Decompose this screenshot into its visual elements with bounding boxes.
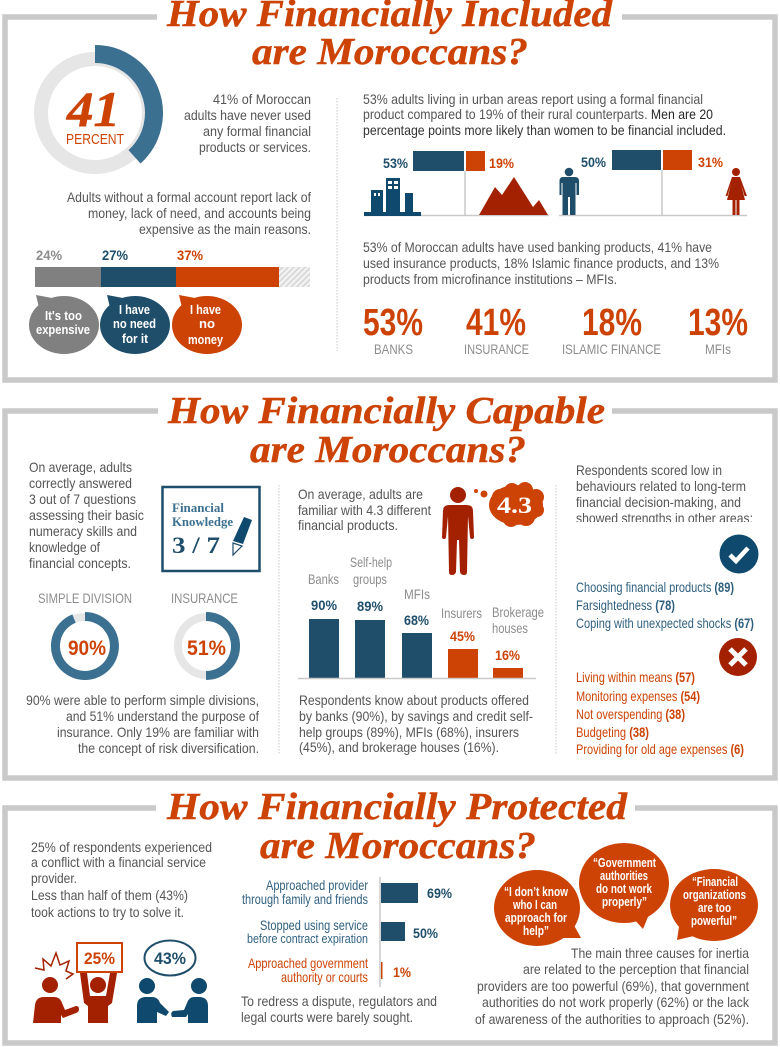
text: causes for inertia: providers are too powerful (69%), that government <box>477 978 749 994</box>
panel: financially protected <box>5 786 775 1043</box>
icon: people in conflict 25%: 25% <box>84 949 115 968</box>
icon: handshake 43%: 43% <box>154 949 186 968</box>
list: weaknesses: Living within means (57) <box>576 669 695 685</box>
text: correct answers: financial concepts. <box>29 555 131 571</box>
bar chart: actions taken: Approached government <box>248 955 368 971</box>
stat: banks <box>363 302 423 357</box>
stat: islamic finance <box>562 302 661 357</box>
speech bubble: who to approach: who I can <box>512 897 557 912</box>
stat: islamic finance: ISLAMIC FINANCE <box>562 341 661 357</box>
text: never used formal financial products: products or services. <box>199 139 311 155</box>
text: product usage: products from microfinance institutions – MFIs. <box>363 271 617 287</box>
ring: insurance 51% <box>171 590 238 676</box>
heading: capable: are Moroccans? <box>250 429 526 471</box>
speech bubble: government authorities: “Government <box>593 855 657 870</box>
ring: insurance 51%: INSURANCE <box>171 590 238 606</box>
text: redress <box>241 993 437 1025</box>
text: causes for inertia: of awareness of the authorities to approach (52%). <box>475 1011 749 1027</box>
bar chart: actions taken: 50% <box>413 925 438 941</box>
chart: men versus women: 31% <box>698 154 723 170</box>
text: correct answers: On average, adults <box>29 459 132 475</box>
bar chart: product awareness <box>298 554 544 678</box>
icon: person thinking 4.3: 4.3 <box>497 493 532 518</box>
text: urban rural men women: product compared to 19% of their rural counterparts. Men are 20 <box>363 106 713 122</box>
bar chart: actions taken: 69% <box>427 885 452 901</box>
text: conflict <box>31 839 212 920</box>
chart: urban versus rural <box>364 151 549 216</box>
heading: included <box>166 0 613 73</box>
text: correct answers: assessing their basic <box>29 507 144 523</box>
text: main reasons: Adults without a formal account report lack of <box>67 189 311 205</box>
heading: capable <box>167 390 605 471</box>
list: weaknesses: Budgeting (38) <box>576 724 649 740</box>
panel: financially included <box>5 0 775 380</box>
text: products known: Respondents know about products offered <box>299 692 529 708</box>
icon: person thinking 4.3 <box>442 482 544 575</box>
donut chart: 41 percent: PERCENT <box>66 131 124 148</box>
list: strengths: Choosing financial products (89) <box>576 579 734 595</box>
speech bubble: no need: no need <box>113 316 156 331</box>
heading: included: are Moroccans? <box>252 31 528 73</box>
panel: financially capable <box>5 390 775 778</box>
text: redress: To redress a dispute, regulators and <box>241 993 437 1009</box>
speech bubble: who to approach: help” <box>523 923 549 938</box>
stacked bar: reasons: 24% <box>36 247 63 263</box>
list: strengths: Coping with unexpected shocks (67) <box>576 615 754 631</box>
speech bubble: no money: I have <box>190 302 221 317</box>
text: causes for inertia: authorities do not work properly (62%) or the lack <box>482 994 750 1010</box>
heading: protected <box>166 786 628 867</box>
text: conflict: took actions to try to solve it. <box>31 904 184 920</box>
list: weaknesses: Not overspending (38) <box>576 706 685 722</box>
text: behaviours <box>576 465 752 522</box>
ring: simple division 90% <box>38 590 132 676</box>
icon: pencil <box>233 517 252 555</box>
speech bubble: no money <box>172 295 242 354</box>
ring: simple division 90%: 90% <box>68 637 106 660</box>
ring: insurance 51%: 51% <box>187 637 226 660</box>
heading: protected: are Moroccans? <box>260 825 536 867</box>
speech bubble: who to approach <box>494 870 581 946</box>
speech bubble: no need: I have <box>119 302 150 317</box>
speech bubble: no money: no <box>199 316 215 331</box>
speech bubble: too expensive: expensive <box>36 322 90 337</box>
stacked bar: reasons <box>35 247 310 287</box>
stat: MFIs: 13% <box>688 302 748 344</box>
text: behaviours: Respondents scored low in <box>576 462 722 478</box>
text: main reasons: money, lack of need, and accounts being <box>88 205 311 221</box>
speech bubble: government authorities: do not work <box>596 881 653 896</box>
text: products known: by banks (90%), by savings and credit self- <box>299 708 533 724</box>
bar chart: product awareness: Self-help <box>350 554 392 570</box>
bar chart: product awareness: Banks <box>308 571 339 587</box>
icon: man <box>560 168 579 215</box>
bar chart: product awareness: Brokerage <box>492 604 544 620</box>
bar chart: actions taken: 1% <box>393 964 411 980</box>
text: conflict: a conflict with a financial service <box>31 854 206 870</box>
text: correct answers: numeracy skills and <box>29 523 137 539</box>
bar chart: actions taken <box>242 877 452 987</box>
text: behaviours: financial decision-making, and <box>576 494 741 510</box>
text: divisions and insurance: the concept of risk diversification. <box>78 740 259 756</box>
speech bubble: financial organizations: organizations <box>683 887 746 902</box>
list: strengths: Farsightedness (78) <box>576 597 675 613</box>
icon: mountains <box>479 177 548 215</box>
text: causes for inertia: are related to the perception that financial <box>523 961 749 977</box>
bar chart: product awareness: MFIs <box>404 586 430 602</box>
bar chart: actions taken: Approached provider <box>266 877 368 893</box>
heading: protected: How Financially Protected <box>166 786 628 828</box>
chart: urban versus rural: 53% <box>383 155 408 171</box>
list: weaknesses <box>576 669 744 757</box>
card: financial knowledge 3 of 7: 3 / 7 <box>172 533 220 558</box>
icon: handshake 43% <box>137 940 208 1023</box>
speech bubble: no money: money <box>188 332 224 347</box>
speech bubble: financial organizations: are too <box>698 900 731 915</box>
icon: woman <box>726 168 747 215</box>
speech bubble: who to approach: “I don’t know <box>504 884 569 899</box>
text: divisions and insurance: insurance. Only 19% are familiar with <box>57 724 259 740</box>
bar chart: actions taken: Stopped using service <box>260 917 368 933</box>
text: correct answers: knowledge of <box>29 539 100 555</box>
heading: capable: How Financially Capable <box>167 390 605 432</box>
text: urban rural men women: 53% adults living in urban areas report using a formal financial <box>363 91 703 107</box>
text: urban rural men women <box>363 91 726 138</box>
stacked bar: reasons: 27% <box>102 247 129 263</box>
icon: people in conflict 25% <box>33 943 122 1023</box>
stat: insurance <box>464 302 529 357</box>
text: never used formal financial products <box>184 91 311 155</box>
speech bubble: too expensive: It's too <box>45 308 82 323</box>
stat: MFIs: MFIs <box>705 341 731 357</box>
text: correct answers: correctly answered <box>29 475 132 491</box>
text: familiar with products: financial products. <box>298 517 398 533</box>
list: strengths <box>576 579 754 631</box>
bar chart: actions taken: authority or courts <box>281 969 368 985</box>
speech bubble: who to approach: approach for <box>505 910 567 925</box>
text: causes for inertia <box>475 945 750 1027</box>
donut chart: 41 percent <box>41 54 154 167</box>
speech bubble: too expensive <box>29 295 99 354</box>
bar chart: product awareness: groups <box>353 571 387 587</box>
stacked bar: reasons: 37% <box>177 247 204 263</box>
text: product usage: 53% of Moroccan adults have used banking products, 41% have <box>363 239 712 255</box>
text: familiar with products <box>298 486 431 533</box>
stat: banks: BANKS <box>374 341 413 357</box>
text: product usage: used insurance products, 18% Islamic finance products, and 13% <box>363 255 719 271</box>
text: familiar with products: On average, adults are <box>298 486 423 502</box>
text: behaviours: behaviours related to long-term <box>576 478 746 494</box>
speech bubble: financial organizations: “Financial <box>692 874 738 889</box>
text: correct answers <box>29 459 144 571</box>
speech bubble: no need: for it <box>122 331 149 346</box>
text: conflict: Less than half of them (43%) <box>31 887 188 903</box>
bar chart: actions taken: before contract expiration <box>247 931 368 946</box>
chart: men versus women: 50% <box>581 154 606 170</box>
text: correct answers: 3 out of 7 questions <box>29 491 136 507</box>
stat: banks: 53% <box>363 302 423 344</box>
text: divisions and insurance: and 51% understand the purpose of <box>66 708 259 724</box>
text: never used formal financial products: any formal financial <box>203 123 311 139</box>
bar chart: product awareness: 89% <box>357 598 384 614</box>
text: conflict: provider. <box>31 870 77 886</box>
card: financial knowledge 3 of 7: Financial <box>172 500 224 515</box>
chart: urban versus rural: 19% <box>489 155 514 171</box>
bar chart: product awareness: 90% <box>311 597 338 613</box>
text: divisions and insurance <box>26 692 259 756</box>
donut chart: 41 percent: 41 <box>66 81 120 137</box>
text: familiar with products: familiar with 4.3 different <box>298 502 431 518</box>
card: financial knowledge 3 of 7 <box>162 487 260 571</box>
text: behaviours: showed strengths in other areas: <box>576 510 753 526</box>
bar chart: product awareness: houses <box>492 620 528 636</box>
icon: check <box>720 534 758 574</box>
stat: insurance: 41% <box>466 302 526 344</box>
bar chart: product awareness: 68% <box>404 612 429 628</box>
ring: simple division 90%: SIMPLE DIVISION <box>38 590 132 606</box>
speech bubble: no need <box>100 295 170 354</box>
bar chart: product awareness: 45% <box>450 628 475 644</box>
speech bubble: government authorities: authorities <box>600 868 648 883</box>
text: divisions and insurance: 90% were able to perform simple divisions, <box>26 692 259 708</box>
text: product usage <box>363 239 719 287</box>
text: main reasons: expensive as the main reasons. <box>139 221 311 237</box>
text: urban rural men women: percentage points more likely than women to be financial included. <box>363 122 726 138</box>
stat: insurance: INSURANCE <box>464 341 529 357</box>
stat: islamic finance: 18% <box>582 302 642 344</box>
bar chart: product awareness: Insurers <box>441 605 482 621</box>
text: causes for inertia: The main three causes for inertia <box>571 945 749 961</box>
text: products known <box>299 692 533 755</box>
bar chart: product awareness: 16% <box>495 647 520 663</box>
text: never used formal financial products: 41% of Moroccan <box>213 91 311 107</box>
text: redress: legal courts were barely sought. <box>241 1009 413 1025</box>
speech bubble: financial organizations: powerful” <box>691 913 737 928</box>
bar chart: actions taken: through family and friends <box>242 891 368 907</box>
icon: cross <box>719 638 757 676</box>
speech bubble: government authorities <box>579 843 669 929</box>
list: weaknesses: Providing for old age expenses (6) <box>576 741 744 757</box>
text: products known: (45%), and brokerage houses (16%). <box>299 739 499 755</box>
list: weaknesses: Monitoring expenses (54) <box>576 688 700 704</box>
text: conflict: 25% of respondents experienced <box>31 839 212 855</box>
text: products known: help groups (89%), MFIs (68%), insurers <box>299 724 519 740</box>
speech bubble: government authorities: properly” <box>602 894 647 909</box>
chart: men versus women <box>559 150 747 216</box>
text: main reasons <box>67 189 311 237</box>
icon: city <box>364 178 421 216</box>
speech bubble: financial organizations <box>670 869 758 941</box>
text: never used formal financial products: adults have never used <box>184 107 311 123</box>
stat: MFIs <box>688 302 748 357</box>
card: financial knowledge 3 of 7: Knowledge <box>172 514 233 529</box>
